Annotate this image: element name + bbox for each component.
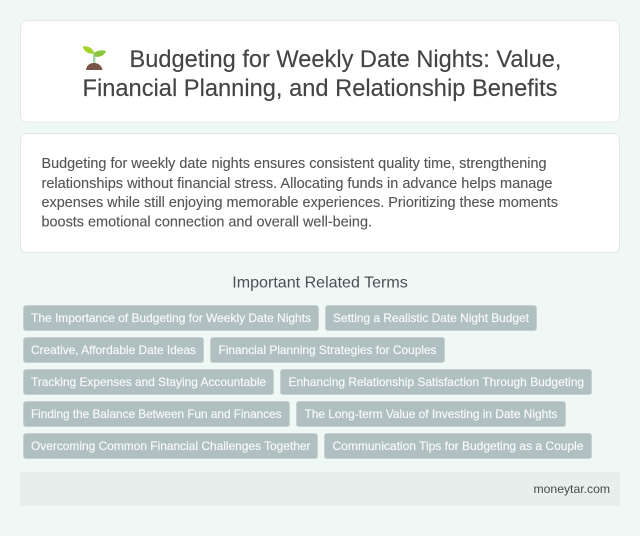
tag: affordable ideas: Creative, Affordable Date Ideas — [31, 343, 196, 357]
panel: summary — [20, 134, 620, 252]
panel: term tags — [24, 306, 592, 458]
tag: planning strategies: Financial Planning Strategies for Couples — [218, 343, 436, 357]
heading: related terms: Important Related Terms — [232, 274, 408, 292]
tag: planning strategies — [210, 338, 444, 362]
panel: title card — [20, 20, 620, 122]
icon: seedling — [83, 46, 106, 70]
tag: relationship satisfaction: Enhancing Relationship Satisfaction Through Budgeting — [288, 375, 584, 389]
tag: importance of budgeting — [24, 306, 318, 330]
tag: fun and finances — [24, 402, 290, 426]
tag: communication tips — [324, 434, 592, 458]
tag: affordable ideas — [24, 338, 204, 362]
tag: tracking expenses: Tracking Expenses and Staying Accountable — [31, 375, 266, 389]
tag: relationship satisfaction — [280, 370, 592, 394]
tag: realistic budget — [326, 306, 536, 330]
summary text — [42, 156, 558, 230]
tag: fun and finances: Finding the Balance Between Fun and Finances — [31, 407, 282, 421]
title: Financial Planning, and Relationship Benefits — [82, 75, 558, 102]
tag: communication tips: Communication Tips for Budgeting as a Couple — [332, 439, 584, 453]
summary text: boosts emotional connection and overall well-being. — [42, 214, 372, 230]
tag: realistic budget: Setting a Realistic Date Night Budget — [333, 311, 530, 325]
tag: tracking expenses — [24, 370, 274, 394]
tag: long-term value: The Long-term Value of Investing in Date Nights — [304, 407, 558, 421]
footer source: moneytar.com — [534, 482, 610, 496]
tag: financial challenges: Overcoming Common Financial Challenges Together — [31, 439, 311, 453]
footer — [20, 472, 620, 506]
title — [82, 46, 562, 102]
tag: long-term value — [296, 402, 566, 426]
tag: financial challenges — [24, 434, 318, 458]
summary text: expenses while still enjoying memorable experiences. Prioritizing these moments — [42, 195, 558, 211]
title: Budgeting for Weekly Date Nights: Value, — [130, 46, 562, 73]
summary text: relationships without financial stress. Allocating funds in advance helps manage — [42, 176, 552, 192]
tag: importance of budgeting: The Importance of Budgeting for Weekly Date Nights — [31, 311, 311, 325]
summary text: Budgeting for weekly date nights ensures consistent quality time, strengthening — [42, 156, 546, 172]
